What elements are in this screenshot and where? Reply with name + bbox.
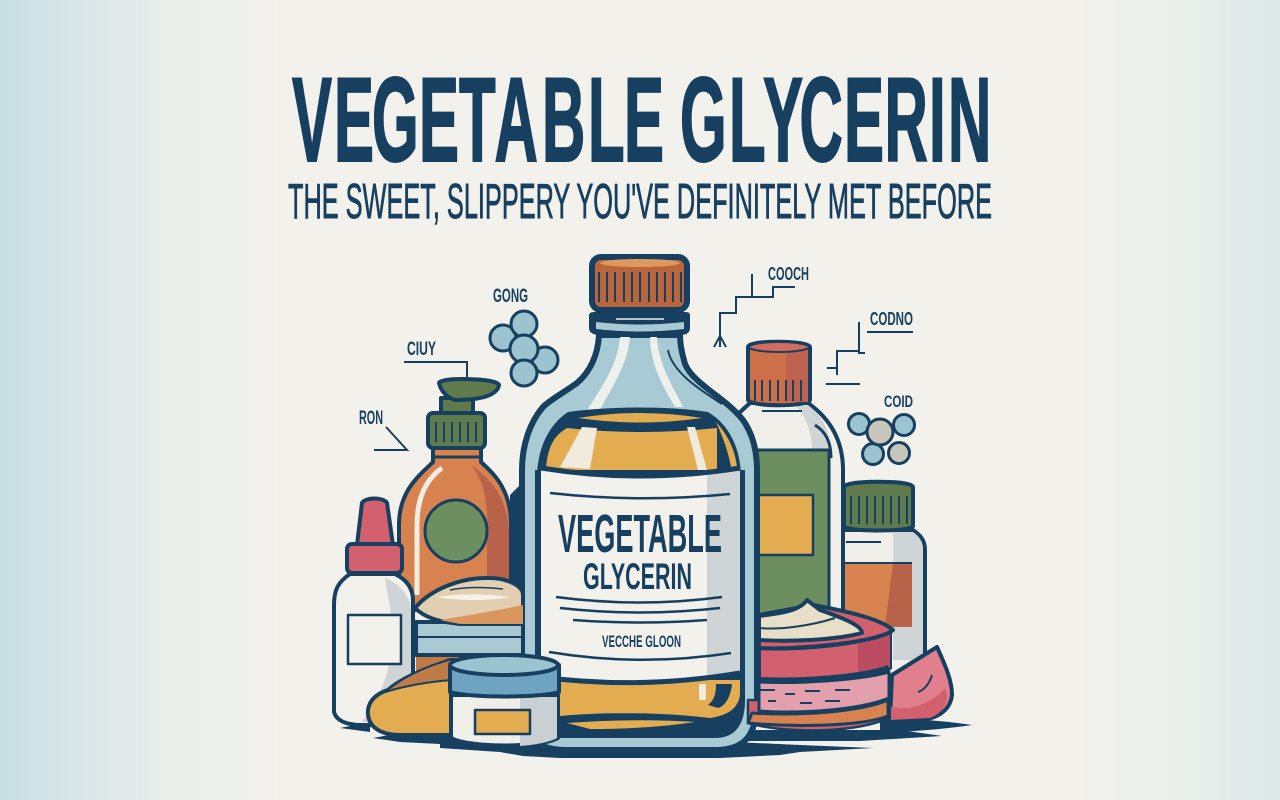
icon: molecule COID (848, 392, 914, 464)
icon: molecule COID: COID (884, 392, 913, 411)
icon: soap bar on tin (415, 578, 523, 690)
icon: cream tin (748, 600, 893, 730)
label: CIUY: CIUY (407, 339, 436, 360)
icon: dropper bottle (334, 498, 413, 725)
bottle label text: VECCHE GLOON (602, 632, 681, 651)
icon: small jar right (843, 482, 925, 680)
icon: molecule GONG: GONG (493, 286, 528, 307)
icon: pump bottle (399, 379, 530, 660)
icon: pink petal (890, 647, 952, 720)
ground shadow (340, 717, 972, 758)
label: COOCH (714, 264, 809, 347)
bottle label text: VEGETABLE (558, 504, 722, 564)
label: CODNO: CODNO (870, 309, 913, 329)
bottle label text (558, 504, 722, 651)
icon: main bottle (522, 257, 757, 750)
title: VEGETABLE GLYCERIN (292, 53, 991, 188)
icon: small cream jar (450, 655, 559, 746)
icon: bread roll (368, 659, 460, 735)
bottle label text: GLYCERIN (583, 556, 692, 597)
label: COOCH: COOCH (768, 264, 809, 284)
label: CIUY (404, 339, 467, 377)
label: RON: RON (359, 408, 383, 429)
label: RON (359, 408, 407, 450)
icon: molecule GONG (490, 286, 558, 386)
label: CODNO (826, 309, 913, 384)
icon: green bottle (735, 342, 843, 620)
